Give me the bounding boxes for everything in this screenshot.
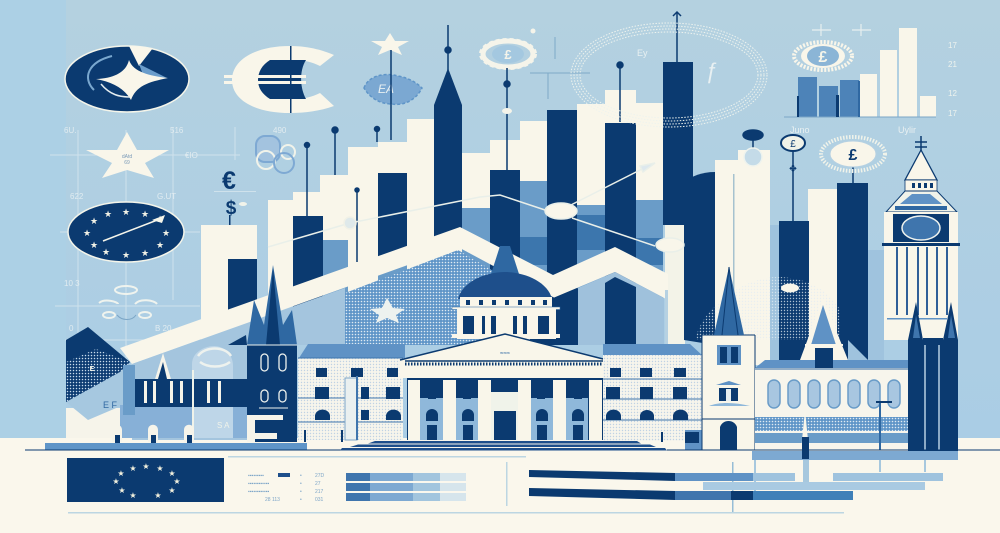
icon: pound coin middle: £ — [849, 147, 858, 164]
church tower — [702, 267, 755, 450]
axis labels: right — [790, 125, 916, 135]
line chart with arrow — [268, 148, 762, 252]
icon: pound coin upper right: £ — [819, 49, 828, 66]
left gridlines — [50, 127, 240, 400]
legend: EU flag: ★ — [173, 477, 181, 486]
right navy and cream bars — [715, 150, 770, 365]
icon: currency symbols: € — [222, 167, 236, 195]
legend: small data rows: • — [300, 497, 302, 503]
faint marks around the coin — [530, 28, 590, 99]
legend: small data rows — [248, 473, 325, 503]
central building: dome — [452, 230, 560, 339]
legend: small data rows: • — [300, 489, 302, 495]
icon: star clock dial: ★ — [122, 207, 130, 217]
podium strip left — [25, 443, 345, 450]
legend: EU flag: ★ — [118, 486, 126, 495]
pointed gates — [112, 425, 194, 442]
icon: gear pound coin: £ — [504, 47, 512, 62]
pin markers on bars — [304, 12, 853, 262]
central building: portico: ≈≈≈ — [500, 351, 511, 357]
left chart axis labels: 490 — [273, 126, 287, 135]
legend: EU flag: ★ — [129, 464, 137, 473]
legend: small data rows: • — [300, 481, 302, 487]
cream stepped bars — [201, 90, 663, 340]
left building with tower — [112, 265, 297, 450]
ring labels — [637, 48, 717, 83]
columns — [408, 380, 602, 440]
central building: right wing — [603, 344, 703, 450]
icon: five-point star — [371, 33, 409, 55]
dark twin-spire tower — [908, 302, 958, 452]
cream E block — [247, 415, 283, 442]
icon: gear badge with EA: EA — [378, 82, 394, 96]
chart values: 17 — [948, 41, 957, 50]
icon: gear pound coin — [480, 39, 536, 69]
icon: currency symbols: $ — [226, 198, 237, 219]
legend: EU flag — [67, 458, 224, 502]
icon: star clock dial: ★ — [122, 250, 130, 260]
small circle glyphs — [99, 286, 157, 320]
bar chart: central skyline bars — [201, 62, 884, 365]
icon: star clock dial — [68, 202, 184, 262]
legend: EU flag: ★ — [117, 469, 125, 478]
legend: small data rows: ▪▪▪▪▪▪▪▪▪▪▪▪ — [248, 481, 269, 487]
legend: small data rows: • — [300, 473, 302, 479]
ring labels: Ey — [637, 48, 648, 58]
navy bars — [228, 62, 693, 345]
axis labels: right: Juno — [790, 125, 810, 135]
legend: EU flag: ★ — [154, 491, 162, 500]
right hall — [755, 284, 908, 460]
icon: star with label: dAtd — [122, 154, 132, 160]
central building: portico — [340, 334, 667, 450]
legend: small data rows: 27 — [315, 481, 321, 487]
icon: star clock dial: ★ — [90, 216, 98, 226]
icon: star clock dial: ★ — [90, 240, 98, 250]
legend: EU flag: ★ — [168, 486, 176, 495]
legend: small data rows: 217 — [315, 489, 324, 495]
icon: star with label — [86, 132, 169, 178]
left chart axis labels: 622 — [70, 192, 84, 201]
icon: star clock dial: ★ — [102, 247, 110, 257]
icon: star with label: 69 — [124, 160, 130, 166]
legend: small data rows: 27D — [315, 473, 325, 479]
bottom rules — [68, 456, 844, 514]
legend: EU flag: ★ — [168, 469, 176, 478]
legend: EU flag: ★ — [112, 477, 120, 486]
big ben clock tower — [882, 136, 960, 340]
left building with tower: S A — [217, 421, 230, 430]
legend: small data rows: ▪▪▪▪▪▪▪▪▪▪▪▪ — [248, 489, 269, 495]
icon: star clock dial: ★ — [141, 209, 149, 219]
left chart axis labels: €IO — [185, 151, 198, 160]
legend: colour table — [346, 473, 466, 501]
icon: currency symbols — [214, 167, 256, 260]
left chart axis labels: 6U. — [64, 126, 76, 135]
light bar shading — [520, 215, 663, 265]
chart values — [948, 41, 957, 118]
icon: star clock dial: ★ — [83, 228, 91, 238]
legend: long horizontal bars — [529, 470, 943, 500]
chart values: 17 — [948, 109, 957, 118]
dotted blue backdrop with star — [132, 250, 668, 440]
ring labels: ƒ — [705, 58, 717, 83]
legend: small data rows: 28 113 — [265, 497, 280, 503]
chart values: 12 — [948, 89, 957, 98]
legend: small data rows: 031 — [315, 497, 324, 503]
legend: EU flag: ★ — [156, 464, 164, 473]
ground line and reflections — [667, 437, 1000, 492]
icon: pound coin upper right — [794, 42, 852, 70]
icon: star clock dial: ★ — [156, 214, 164, 224]
left chart axis labels — [64, 126, 287, 333]
icon: linked rings — [256, 136, 295, 173]
icon: small coin — [781, 135, 805, 175]
bar chart: upper right — [784, 28, 936, 117]
icon: navy pie ellipse — [65, 46, 189, 112]
legend: EU flag: ★ — [129, 491, 137, 500]
icon: star clock dial: ★ — [141, 248, 149, 258]
icon: small coin: ❖ — [789, 164, 798, 175]
chart values: 21 — [948, 60, 957, 69]
icon: pound coin middle — [821, 137, 885, 171]
axis labels: right: Uylir — [898, 125, 916, 135]
lower left chart area: E F — [103, 400, 117, 410]
mid blue lower bars — [320, 181, 663, 340]
legend: EU flag: ★ — [142, 462, 150, 471]
tower body — [247, 345, 297, 442]
icon: gear badge with EA — [364, 74, 422, 104]
chevron trend band — [120, 227, 668, 364]
left chart axis labels: 0 — [69, 324, 74, 333]
left chart axis labels: B 20 — [155, 324, 172, 333]
lower left chart area — [66, 327, 135, 438]
steps — [340, 441, 667, 450]
central building: left wing — [298, 344, 405, 442]
legend: small data rows: ▪▪▪▪▪▪▪▪▪ — [248, 473, 264, 479]
lower left chart area: E — [90, 366, 95, 373]
left chart axis labels: G.UT — [157, 192, 176, 201]
icon: large euro symbol — [224, 46, 334, 113]
tower windows — [261, 354, 286, 402]
icon: star clock dial: ★ — [162, 228, 170, 238]
icon: star clock dial: ★ — [156, 240, 164, 250]
icon: star clock dial: ★ — [104, 209, 112, 219]
dotted ring — [571, 23, 767, 127]
plus markers — [812, 24, 871, 36]
cream mast bar — [665, 225, 685, 345]
left chart axis labels: 516 — [170, 126, 184, 135]
icon: small coin: £ — [790, 139, 796, 150]
dotted halo behind spire — [695, 277, 840, 340]
left chart axis labels: 10 3 — [64, 279, 80, 288]
